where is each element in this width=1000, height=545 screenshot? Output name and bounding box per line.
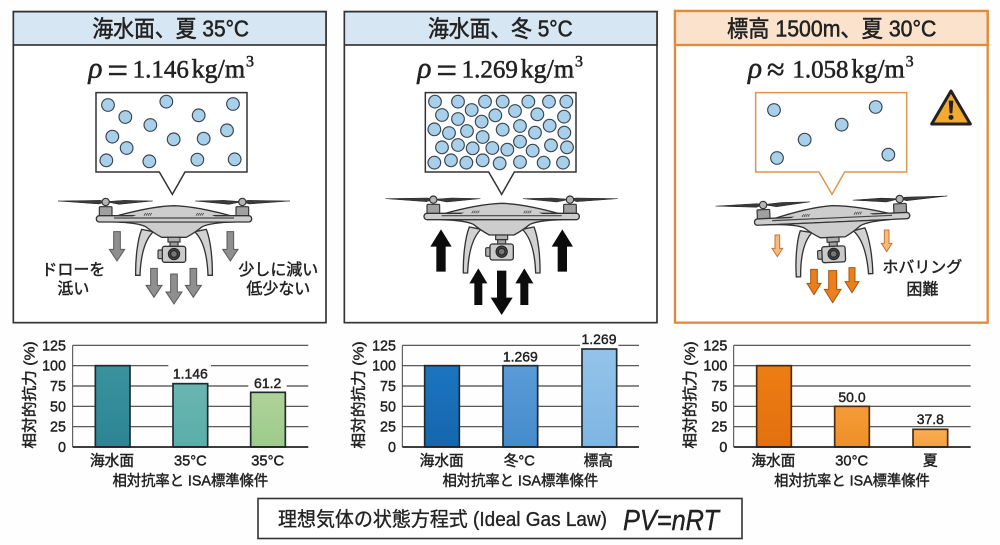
icon: drone [58, 198, 290, 275]
y axis ticks [703, 338, 727, 456]
y axis ticks: 25 [380, 420, 396, 436]
density formula: kg/m [192, 54, 245, 83]
density formula: 1.146 [133, 56, 189, 83]
y axis ticks: 125 [372, 338, 396, 354]
y axis ticks: 0 [719, 440, 727, 456]
chart: relative drag altitude [682, 338, 971, 489]
y axis title: 相対的抗力 (%) [351, 341, 368, 449]
y axis title: 相対的抗力 (%) [22, 341, 39, 449]
y axis ticks: 100 [372, 359, 396, 375]
value labels: 1.146 [173, 366, 208, 382]
category labels: 30°C [835, 454, 868, 470]
left annotation: 泜い [57, 280, 89, 298]
category labels [420, 453, 613, 470]
hovering difficulty annotation: 困難 [906, 281, 938, 299]
y axis ticks: 125 [703, 338, 727, 354]
y axis ticks: 100 [703, 359, 727, 375]
y axis title: 相対的抗力 (%) [682, 341, 699, 449]
icon: drone [386, 196, 618, 273]
category labels: 海水面 [90, 453, 134, 470]
category labels: 海水面 [420, 453, 464, 470]
formula caption: 理想気体の状態方程式 (Ideal Gas Law) [278, 508, 607, 531]
y axis ticks: 50 [50, 399, 66, 415]
density formula: 3 [246, 54, 254, 71]
panel: sea level winter 5°C [344, 12, 657, 323]
value labels: 61.2 [254, 375, 281, 391]
icon: warning triangle [932, 91, 970, 124]
value labels: 50.0 [838, 389, 866, 405]
y axis ticks: 75 [711, 379, 727, 395]
density formula: = [107, 50, 128, 91]
bars [757, 366, 948, 447]
y axis ticks: 75 [50, 379, 66, 395]
category labels: 35°C [174, 454, 207, 470]
value labels [503, 331, 617, 364]
density formula: = [436, 50, 457, 91]
grey downwash arrows [109, 232, 238, 304]
x axis title: 相対抗率と ISA標準條件 [774, 472, 930, 489]
density formula: 1.058 [792, 56, 849, 83]
y axis ticks: 75 [380, 379, 396, 395]
panel heading: sea level summer: 海水面、夏 35°C [92, 16, 249, 42]
y axis ticks: 25 [50, 420, 66, 436]
y axis ticks: 25 [711, 420, 727, 436]
equation: PV=nRT [623, 505, 721, 537]
density formula: ≈ [767, 51, 785, 87]
chart: relative drag sea level winter [351, 331, 639, 489]
icon: tilted drone [715, 193, 950, 280]
category labels: 冬°C [504, 453, 535, 470]
density formula: 3 [906, 54, 914, 71]
panel heading: altitude: 標高 1500m、夏 30°C [727, 16, 936, 42]
orange downwash arrows [807, 268, 859, 303]
density formula: kg/m [851, 54, 905, 83]
bars [95, 366, 285, 447]
category labels: 標高 [584, 453, 613, 470]
panel: sea level summer 35°C [13, 12, 326, 323]
chart: relative drag sea level summer [22, 338, 308, 489]
y axis ticks: 0 [388, 440, 396, 456]
category labels [751, 453, 938, 470]
y axis ticks: 0 [58, 440, 66, 456]
value labels: 1.269 [503, 348, 538, 364]
y axis ticks: 50 [711, 399, 727, 415]
speech bubble with dense air molecules [425, 93, 576, 194]
speech bubble with sparse air molecules [96, 93, 247, 194]
category labels: 35°C [251, 454, 284, 470]
category labels: 夏 [923, 454, 938, 470]
y axis ticks [372, 338, 396, 456]
panel heading: sea level winter [344, 12, 657, 45]
category labels [90, 453, 284, 470]
y axis ticks: 50 [380, 399, 396, 415]
panel: altitude 1500 m summer 30°C [675, 11, 988, 323]
speech bubble with few air molecules [756, 93, 907, 194]
right annotation: 少しに減い [238, 261, 318, 279]
y axis ticks: 100 [42, 359, 66, 375]
right annotation: 低少ない [246, 280, 310, 298]
hovering difficulty annotation: ホバリング [882, 259, 962, 277]
y axis ticks [42, 338, 66, 456]
x axis title: 相対抗率と ISA標準條件 [112, 472, 268, 489]
value labels: 1.269 [581, 331, 617, 347]
density formula: ρ [747, 52, 762, 84]
black thrust arrows [430, 229, 573, 315]
left annotation: ドローを [41, 261, 105, 279]
density formula: 1.269 [462, 56, 518, 83]
weak rotor side arrows [772, 230, 892, 257]
y axis ticks: 125 [42, 338, 66, 354]
x axis title: 相対抗率と ISA標準條件 [442, 472, 598, 489]
panel heading: sea level summer [13, 12, 326, 45]
density formula: ρ [87, 52, 102, 84]
value labels [173, 366, 281, 391]
formula box: ideal gas law [258, 498, 742, 538]
value labels: 37.8 [917, 411, 944, 427]
density formula: 3 [575, 54, 583, 71]
panel heading: sea level winter: 海水面、冬 5°C [428, 16, 573, 42]
bars [425, 349, 617, 447]
panel heading: altitude [675, 11, 988, 45]
density formula: ρ [416, 52, 431, 84]
value labels [838, 389, 944, 427]
density formula: kg/m [521, 54, 574, 83]
category labels: 海水面 [751, 453, 795, 470]
